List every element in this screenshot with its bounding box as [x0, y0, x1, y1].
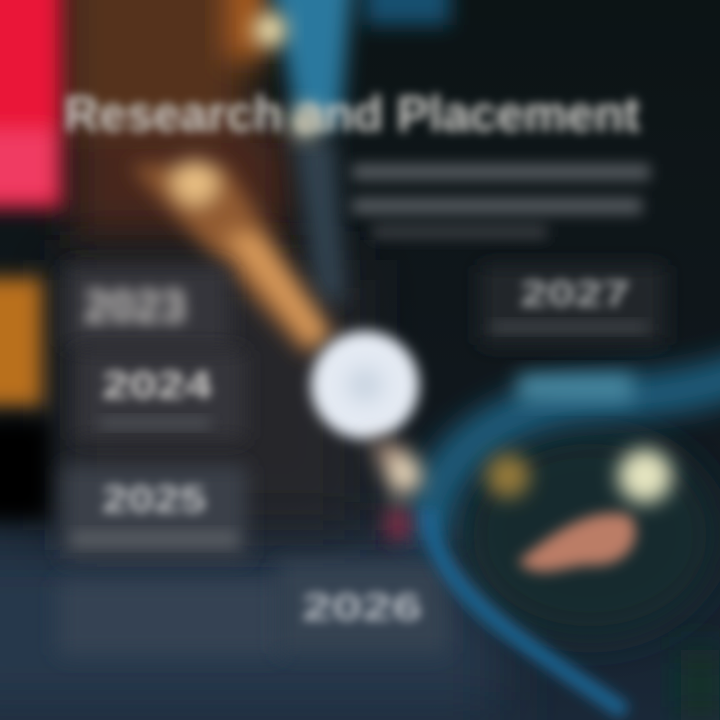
globe: blue ring [428, 360, 720, 720]
brown top-left backdrop [60, 0, 290, 235]
card: upper right: 2027 [520, 273, 630, 314]
red side panel [0, 0, 62, 208]
card 1 [65, 265, 230, 347]
card 4 [58, 580, 283, 656]
globe: landmass [518, 513, 636, 572]
card: upper right [480, 265, 665, 345]
card 3 [62, 465, 247, 560]
title: Research and Placement [64, 86, 640, 142]
card 3: 2025 [102, 479, 206, 521]
subtitle text [352, 164, 650, 238]
diagonal orange connector [130, 160, 335, 355]
globe: white glow marker [618, 449, 672, 503]
small node on title [288, 105, 322, 139]
glowing top node [253, 13, 287, 47]
orange side panel [0, 278, 42, 406]
lower connector node [370, 440, 425, 540]
panel: left column cards [58, 265, 283, 656]
globe: yellow marker [486, 454, 530, 498]
card: bottom centre [278, 562, 448, 654]
card 2: 2024 [102, 365, 212, 407]
amber glow by top node [225, 0, 265, 60]
card: bottom centre: 2026 [302, 587, 422, 629]
blue top streak [265, 0, 450, 300]
card 2 [75, 350, 245, 440]
black side band [0, 420, 50, 520]
central white node [311, 331, 419, 439]
card 1: 2023 [84, 280, 186, 332]
